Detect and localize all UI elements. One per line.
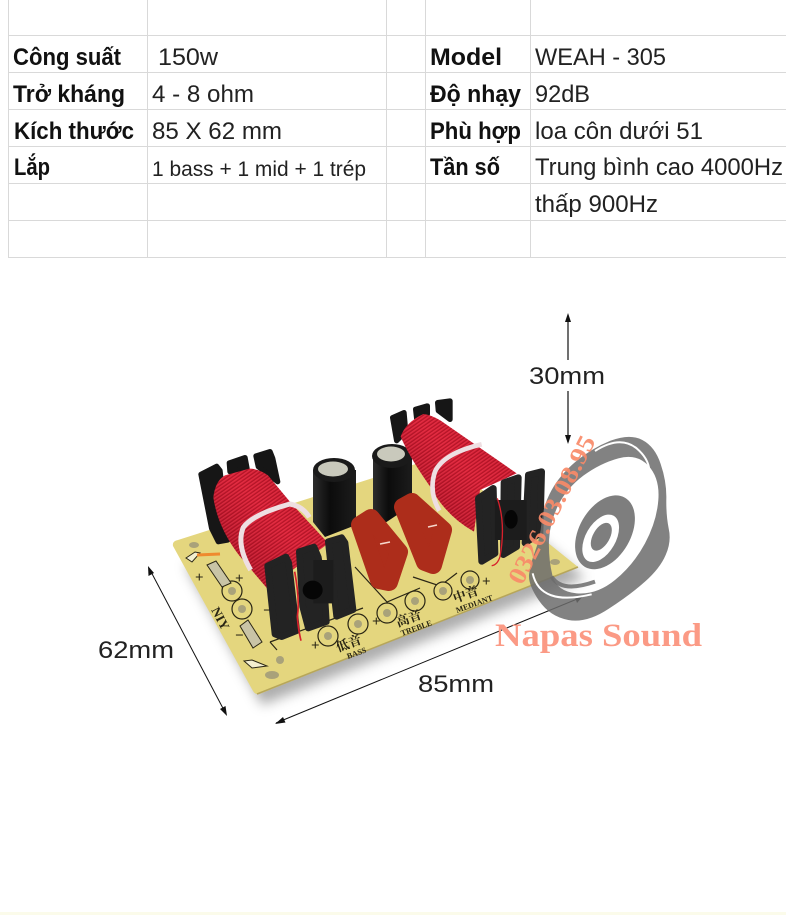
watermark: phone number: 0326.03.08.95 bbox=[503, 431, 601, 589]
circuit board: MEDIANT bbox=[455, 593, 495, 615]
dimension: height 30mm bbox=[529, 313, 605, 444]
left front bobbin bbox=[268, 538, 353, 637]
row: impedance and sensitivity: Trở kháng bbox=[13, 81, 125, 108]
left film capacitor bbox=[360, 518, 399, 582]
dimension: width 62mm bbox=[98, 566, 227, 716]
circuit board: BASS bbox=[346, 645, 368, 661]
bottom tinted strip bbox=[0, 912, 786, 915]
row: power and model bbox=[13, 44, 666, 71]
row: fitting and frequency bbox=[14, 153, 783, 181]
dimension: length 85mm: 85mm bbox=[418, 671, 494, 698]
terminal pads bbox=[222, 571, 479, 646]
left electrolytic capacitor bbox=[313, 458, 356, 537]
dimension: height 30mm: 30mm bbox=[529, 363, 605, 390]
left coil binding band bbox=[241, 504, 309, 570]
circuit board: − bbox=[235, 628, 244, 644]
left inductor assembly bbox=[201, 452, 353, 641]
screw icons bbox=[186, 552, 200, 562]
left coil back bobbin bbox=[201, 452, 278, 542]
row: fitting and frequency: 1 bass + 1 mid + 1 trép bbox=[152, 158, 366, 181]
row: power and model: 150w bbox=[158, 44, 218, 71]
circuit board: + bbox=[482, 574, 491, 590]
left inductor coil bbox=[213, 469, 328, 589]
circuit board: 中音 bbox=[451, 583, 480, 606]
circuit board: + bbox=[235, 571, 244, 587]
right bobbin hole bbox=[504, 510, 518, 529]
right electrolytic capacitor bbox=[372, 444, 412, 523]
row: fitting and frequency: Lắp bbox=[14, 153, 50, 181]
row: power and model: Công suất bbox=[13, 44, 121, 71]
right coil lead wire bbox=[492, 498, 502, 566]
circuit board bbox=[173, 456, 578, 694]
specification table bbox=[8, 0, 786, 258]
circuit board: TREBLE bbox=[400, 618, 433, 638]
row: low frequency: thấp 900Hz bbox=[535, 191, 658, 218]
row: size and suitable cone bbox=[14, 118, 703, 145]
left bobbin hole bbox=[303, 581, 323, 599]
circuit board: + bbox=[372, 614, 381, 630]
circuit board: 高音 bbox=[394, 607, 423, 630]
row: impedance and sensitivity: Độ nhạy bbox=[430, 81, 521, 108]
watermark: brand name: Napas Sound bbox=[495, 618, 702, 654]
circuit board: NIY bbox=[208, 604, 233, 633]
right inductor coil bbox=[401, 414, 517, 532]
row: fitting and frequency: Trung bình cao 4000Hz bbox=[535, 154, 783, 181]
right coil binding band bbox=[432, 444, 482, 511]
left coil lead wire bbox=[295, 572, 301, 641]
circuit board: + bbox=[195, 570, 204, 586]
logo swooshes bbox=[533, 442, 649, 598]
watermark: speaker logo bbox=[529, 437, 670, 621]
right coil back bobbin bbox=[393, 401, 450, 441]
row: fitting and frequency: Tần số bbox=[430, 154, 500, 181]
row: size and suitable cone: Kích thước bbox=[14, 118, 134, 145]
circuit board: + bbox=[311, 638, 320, 654]
right inductor assembly bbox=[393, 401, 542, 566]
circuit board: − bbox=[263, 603, 272, 619]
row: power and model: WEAH - 305 bbox=[535, 44, 666, 71]
crossover board photo bbox=[173, 401, 585, 705]
row: impedance and sensitivity: 92dB bbox=[535, 81, 590, 108]
row: impedance and sensitivity: 4 - 8 ohm bbox=[152, 81, 254, 108]
board shadow bbox=[185, 540, 585, 705]
row: size and suitable cone: loa côn dưới 51 bbox=[535, 118, 703, 145]
right front bobbin bbox=[478, 472, 542, 561]
logo cone ring bbox=[563, 485, 647, 580]
row: size and suitable cone: 85 X 62 mm bbox=[152, 118, 282, 145]
right film capacitor bbox=[403, 502, 443, 565]
row: impedance and sensitivity bbox=[13, 81, 590, 108]
board labels: 低音 bbox=[334, 632, 363, 655]
dimension: width 62mm: 62mm bbox=[98, 637, 174, 664]
row: size and suitable cone: Phù hợp bbox=[430, 118, 521, 145]
row: power and model: Model bbox=[430, 44, 502, 71]
dimension: length 85mm bbox=[275, 596, 583, 724]
solder slots bbox=[207, 561, 231, 587]
